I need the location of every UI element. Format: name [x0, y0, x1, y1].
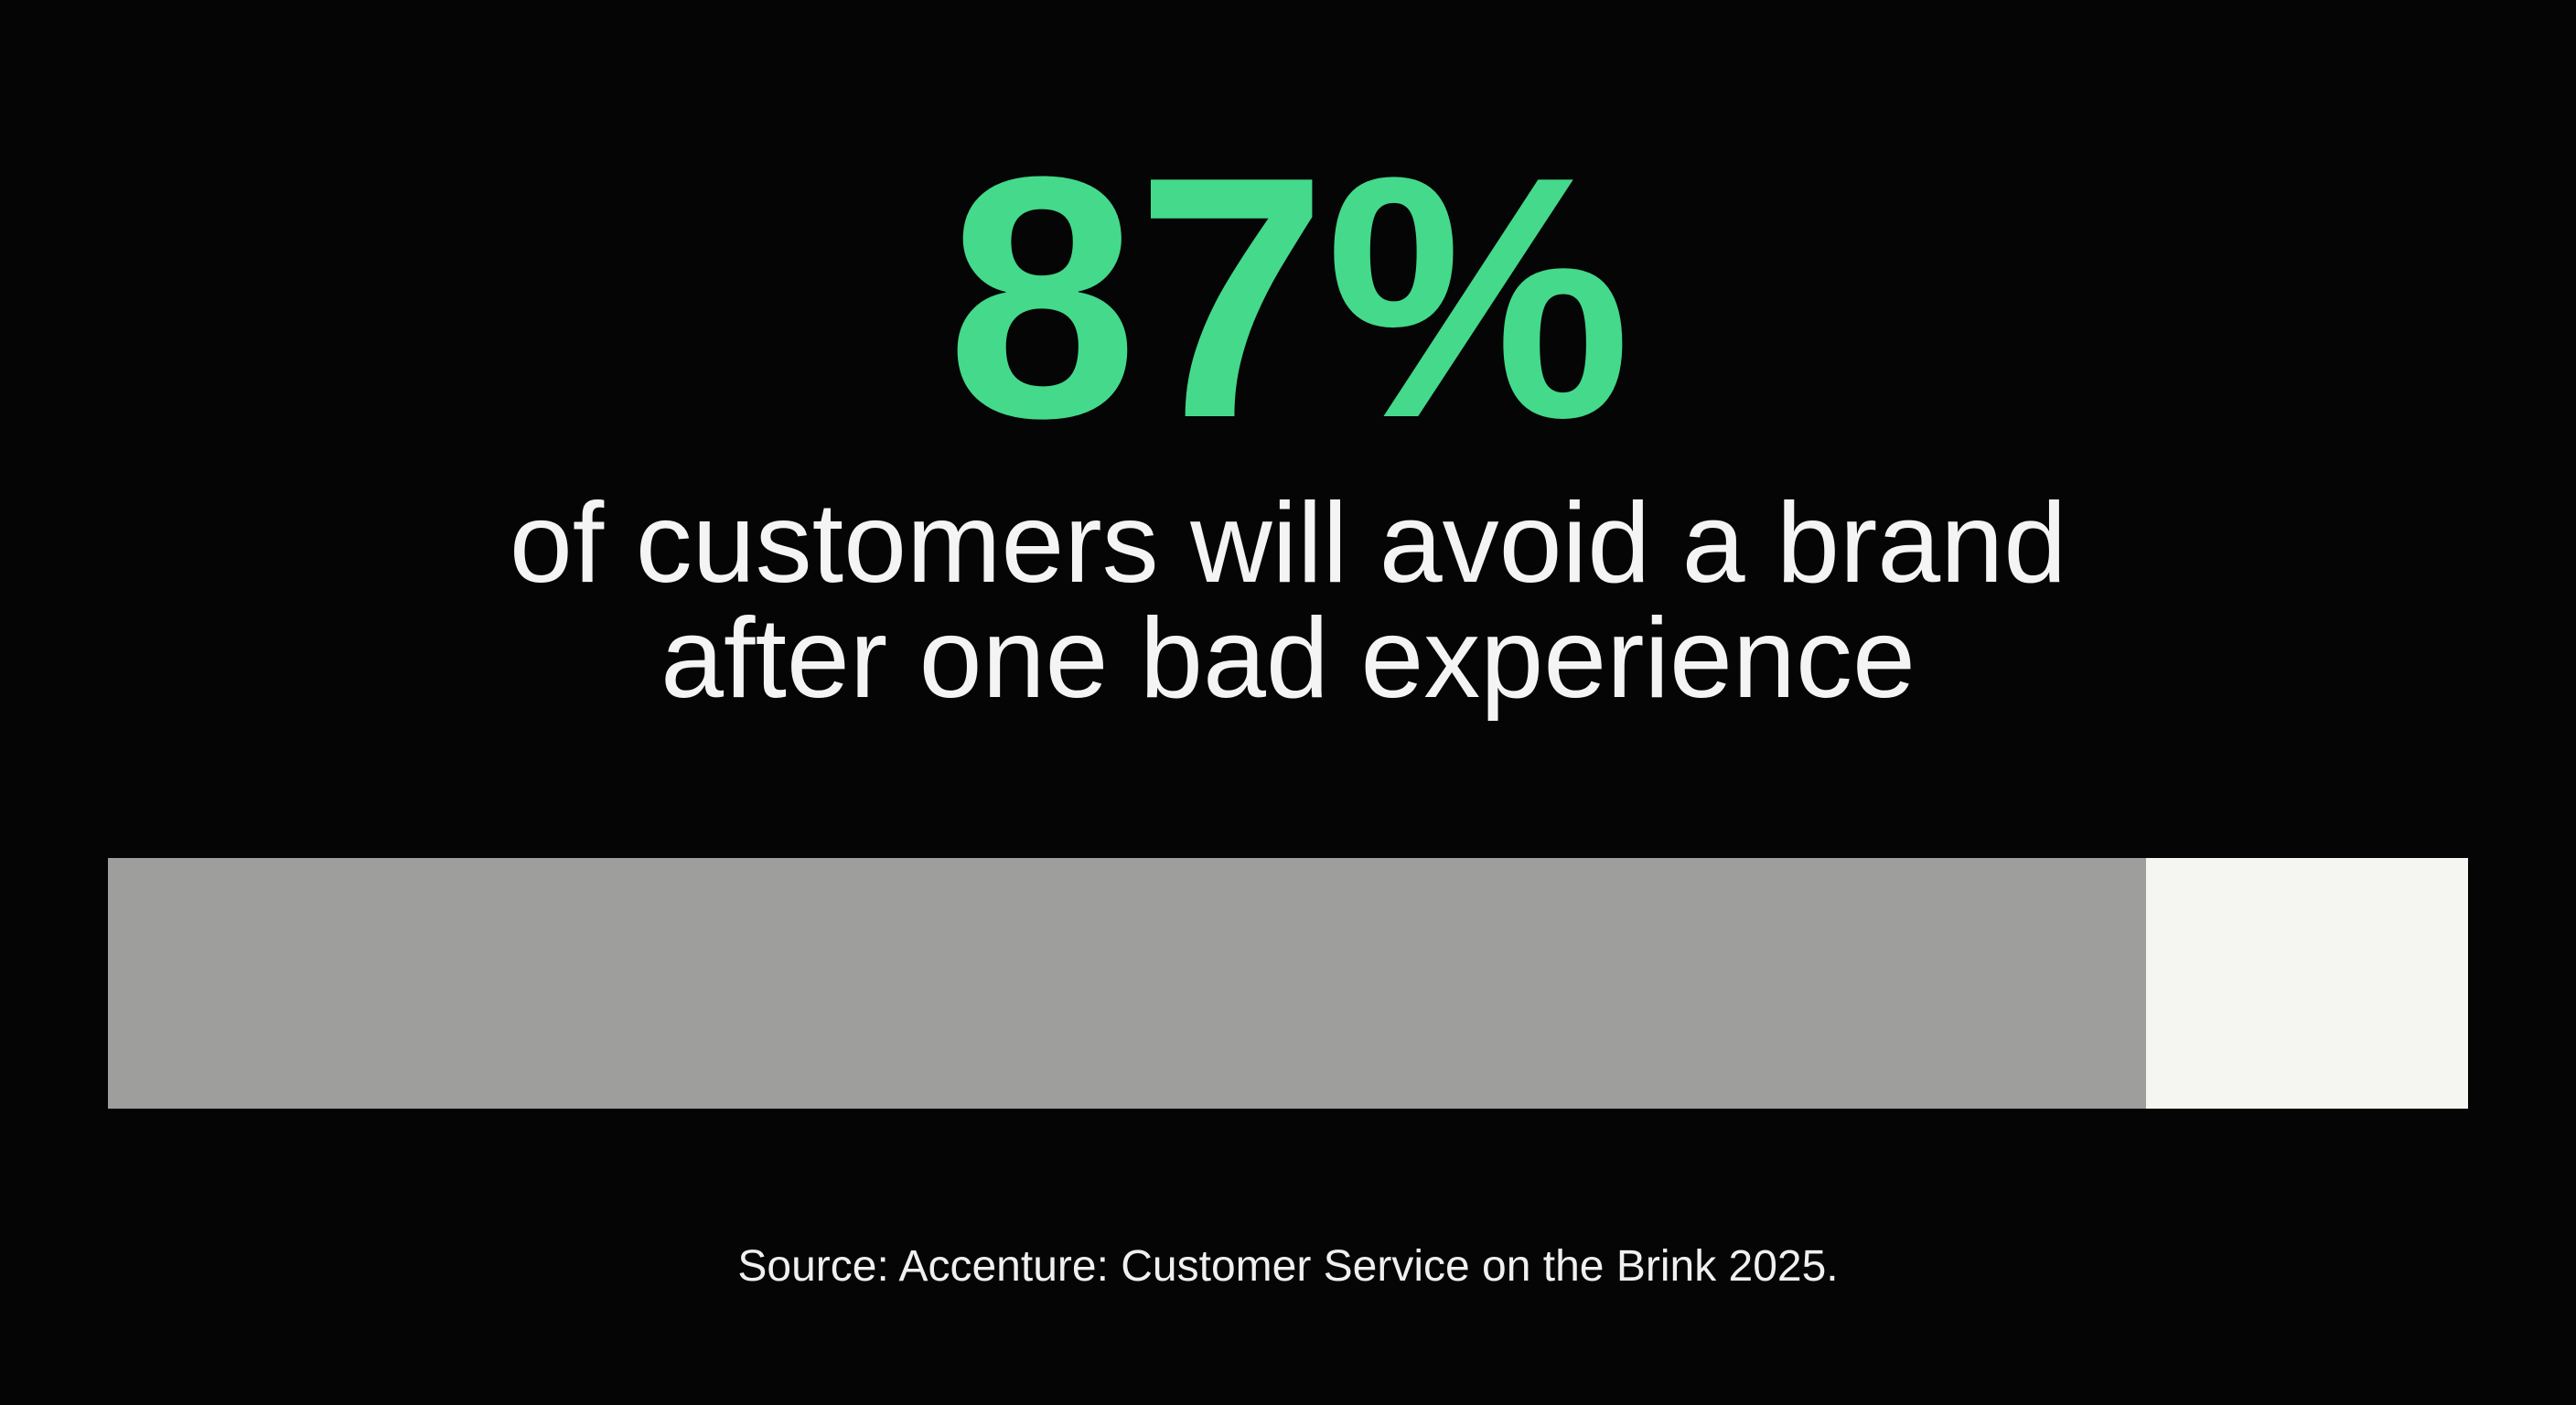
text block: description [510, 480, 2066, 722]
text block: description: of customers will avoid a brand [510, 480, 2066, 606]
source note: Source: Accenture: Customer Service on the Brink 2025. [737, 1242, 1839, 1291]
bar fill: 87% [108, 858, 2146, 1109]
text block: description: after one bad experience [660, 595, 1916, 722]
title: 87% statistic: 87% [947, 105, 1629, 489]
bar chart: 87% progress bar [108, 858, 2468, 1109]
